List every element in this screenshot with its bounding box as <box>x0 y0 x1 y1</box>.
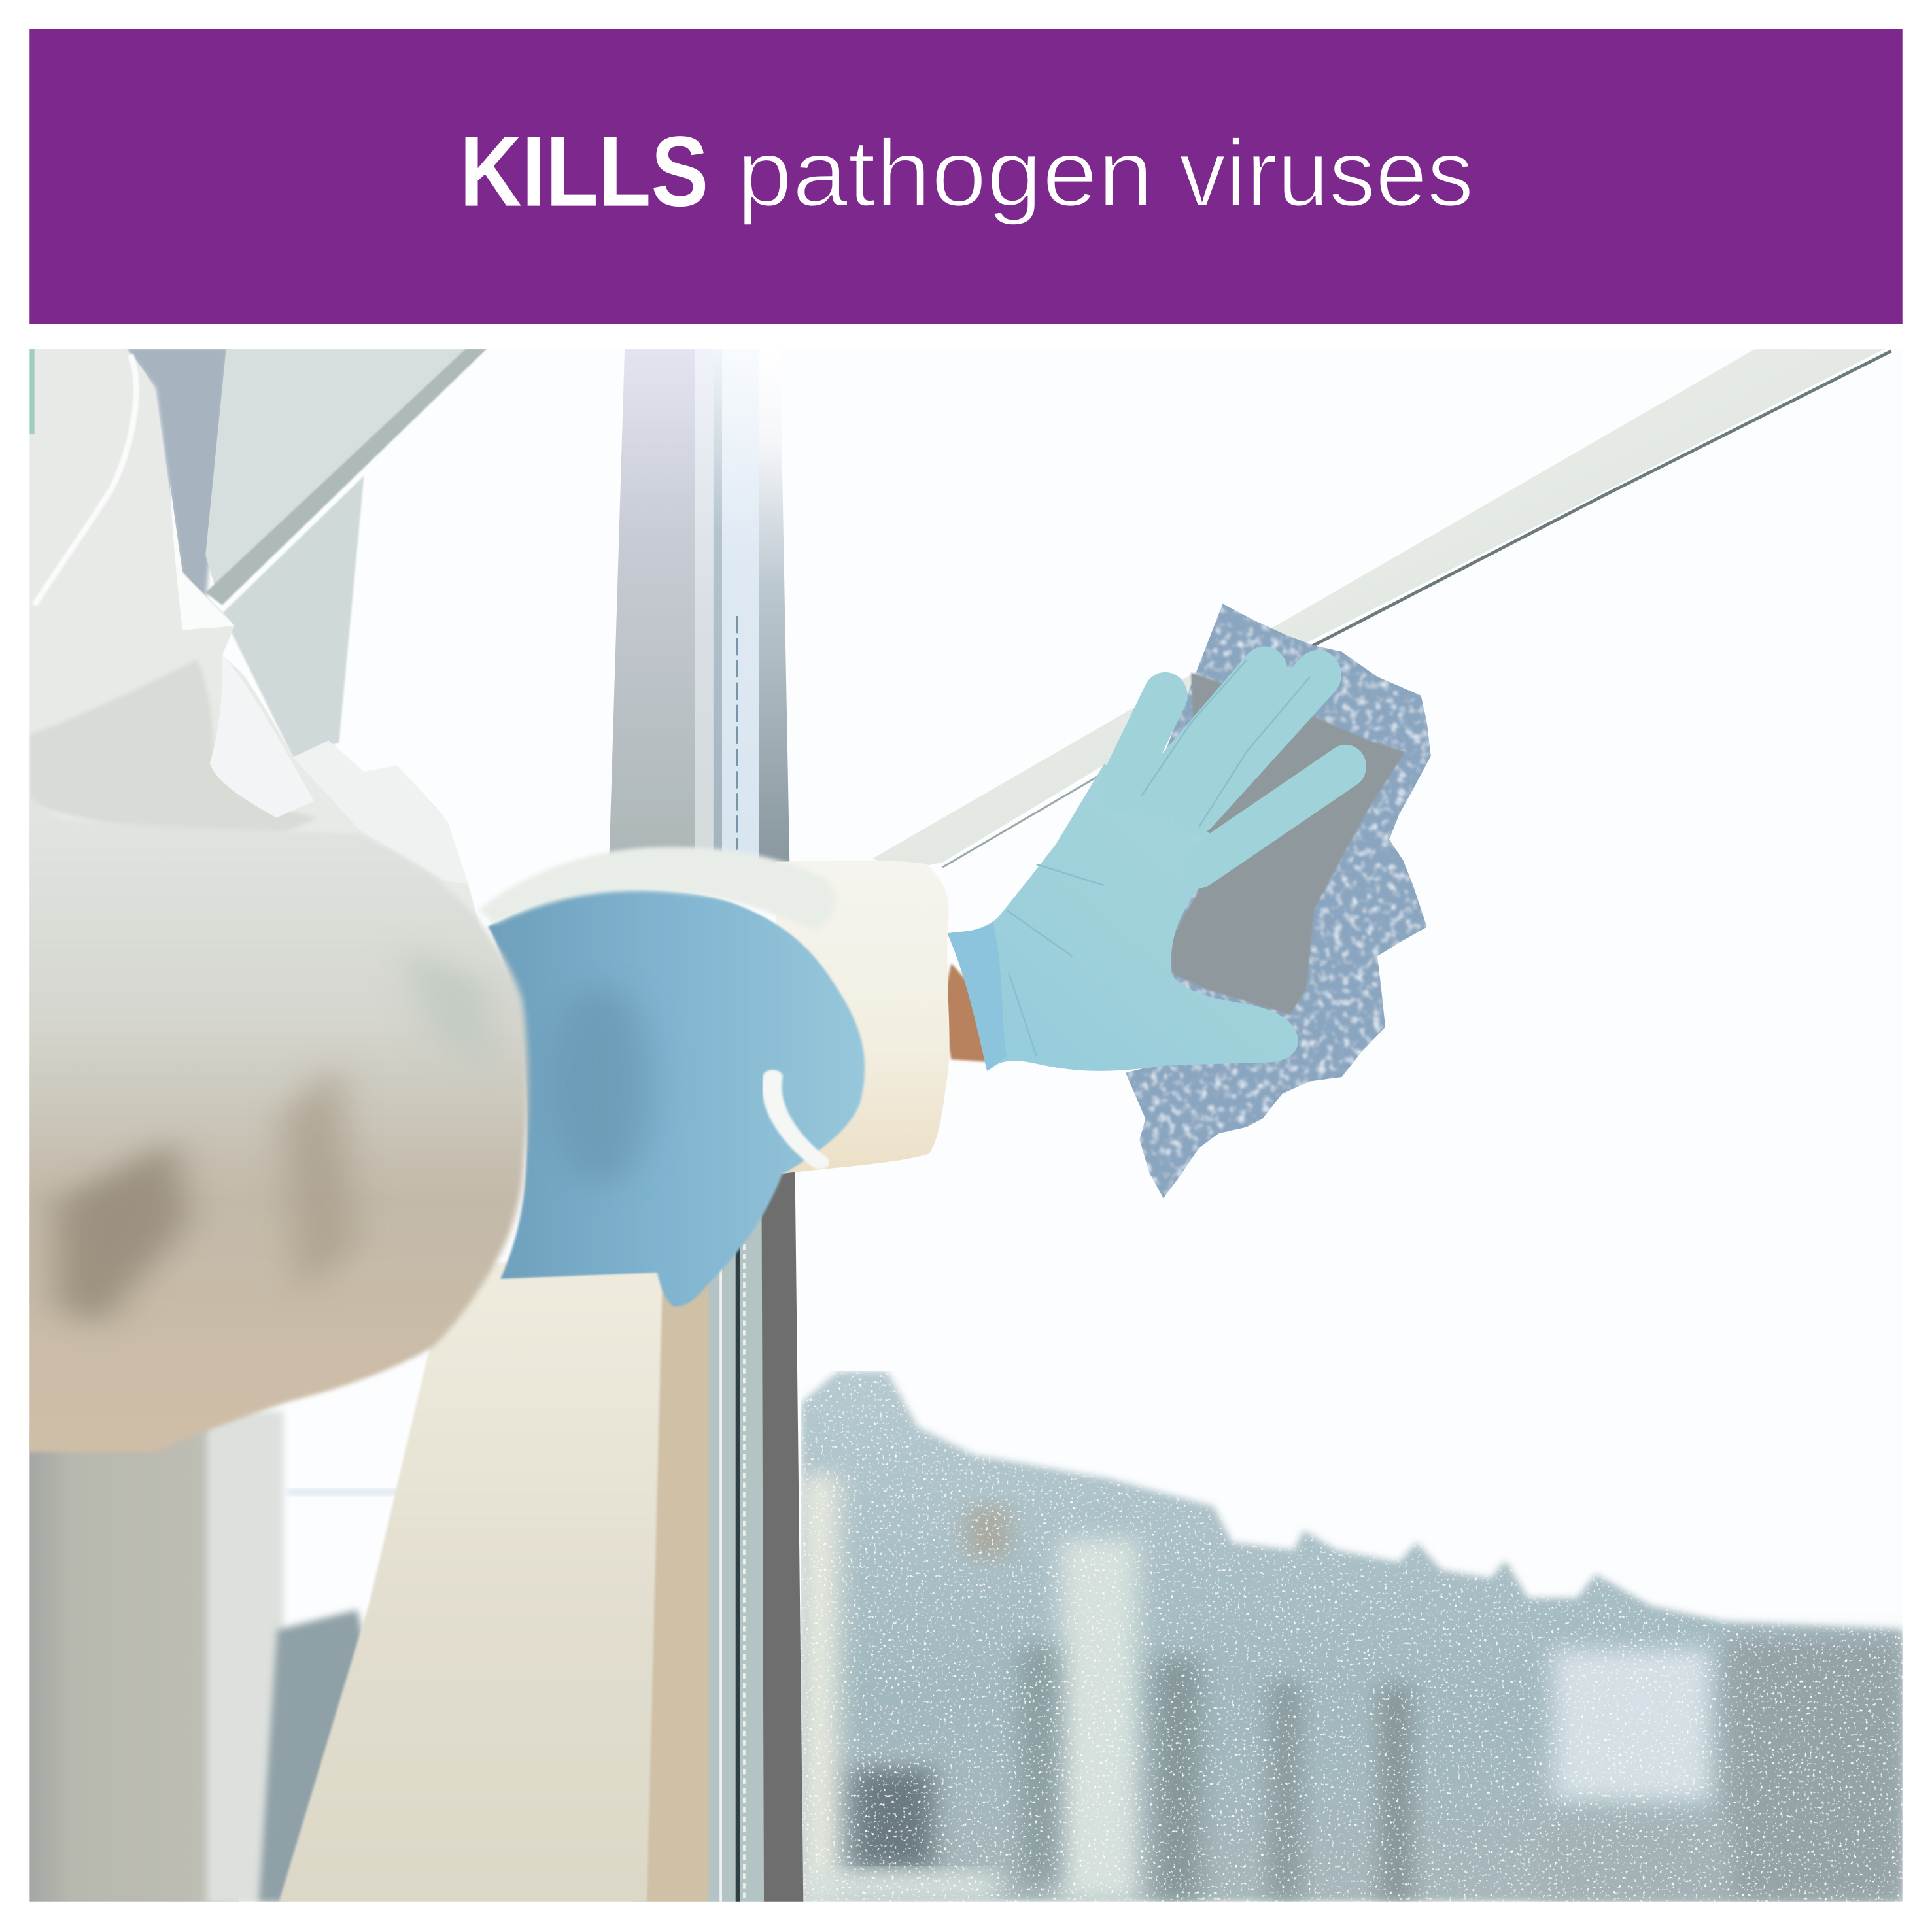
glove creases <box>1007 660 1310 1056</box>
protective suit cuff base <box>776 861 950 1174</box>
arm skin at wrist <box>941 963 988 1062</box>
translucent blurred sleeve ring <box>479 847 836 931</box>
background blurred glove <box>488 889 865 1307</box>
title banner <box>29 29 1903 324</box>
translucent finger ring <box>772 1076 819 1162</box>
suit upper shoulder fabric <box>29 347 481 931</box>
title text: second light word: viruses <box>1179 120 1474 226</box>
central window column, upper part <box>609 349 790 875</box>
cream column in foreground <box>279 1263 663 1904</box>
foreground glove on cloth <box>947 660 1345 1071</box>
lower-left window frame <box>29 1411 409 1904</box>
translucent rings over the blurred glove <box>479 847 836 1162</box>
wrist band <box>947 923 1007 1071</box>
title text: first light word: pathogen <box>737 120 1153 226</box>
title text: bold part: KILLS <box>460 116 708 228</box>
fingers <box>1120 670 1345 866</box>
blurred foreground sleeve <box>12 781 528 1452</box>
central window column, lower part <box>632 1149 803 1904</box>
photo: gloved hands wiping a window <box>12 347 1903 1904</box>
cloth <box>1126 604 1431 1198</box>
window rail <box>872 349 1891 870</box>
blurred building outside the window <box>801 1371 1903 1902</box>
bright sky background <box>29 349 1903 1902</box>
upper-left background wall <box>124 347 489 757</box>
palm and thumb <box>947 764 1298 1071</box>
